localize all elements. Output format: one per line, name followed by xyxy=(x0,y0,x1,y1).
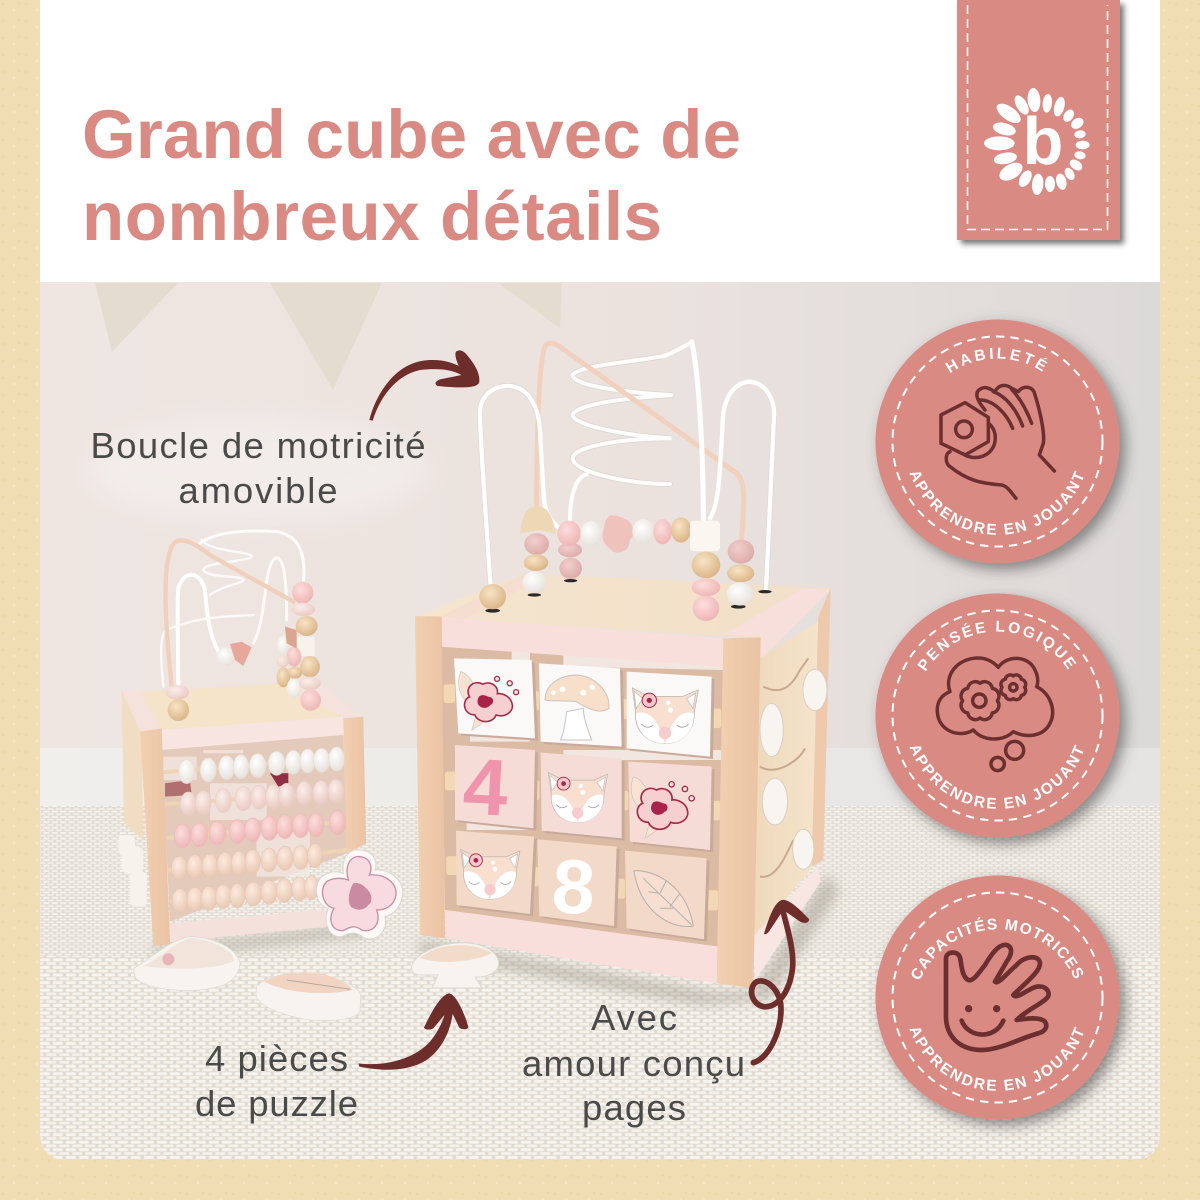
white header panel xyxy=(40,0,1160,283)
arrow to wire loop xyxy=(369,350,479,421)
puzzle piece: flower xyxy=(316,850,403,939)
soft glow behind top label xyxy=(116,436,404,504)
badge text bottom: APPRENDRE EN JOUANT xyxy=(910,744,1084,809)
small cube side knobs xyxy=(118,835,147,907)
tile art: flowers xyxy=(459,672,519,730)
side knobs xyxy=(760,669,827,869)
big cube body drawn in 3x coordinates xyxy=(415,573,831,988)
small cube rails xyxy=(122,690,162,731)
label: 4 pièces de puzzle: 4 pièces xyxy=(205,1038,348,1079)
side face xyxy=(753,622,818,937)
tile art: mushroom xyxy=(545,675,609,740)
rug xyxy=(40,806,1160,1160)
label: 4 pièces de puzzle xyxy=(195,1038,358,1124)
tile edge shadows xyxy=(457,661,715,942)
pink wire xyxy=(537,343,744,540)
spiral wire xyxy=(570,343,690,520)
brand tag with logo: b xyxy=(1023,105,1063,179)
icon: hand holding nut xyxy=(941,385,1054,498)
small cube left side xyxy=(122,690,146,840)
label: avec amour conçu pages: amour conçu xyxy=(522,1043,745,1084)
bunting pennants xyxy=(95,283,562,390)
tile art: leaf xyxy=(634,871,693,927)
big cube posts xyxy=(415,616,445,938)
label: avec amour conçu pages xyxy=(522,997,745,1128)
puzzle piece: leaf xyxy=(256,973,361,1021)
puzzle piece: fox xyxy=(134,937,240,991)
badge: capacités motrices xyxy=(872,872,1136,1136)
label: boucle de motricité: amovible xyxy=(178,470,338,511)
puzzle piece: mushroom xyxy=(411,943,499,988)
baseboard xyxy=(40,748,1160,810)
small cube beads xyxy=(166,582,321,721)
white wires xyxy=(480,342,774,590)
tile art: number 4: 4 xyxy=(461,741,511,833)
small cube abacus rows xyxy=(163,747,347,913)
small cube posts xyxy=(140,728,170,947)
small cube top xyxy=(140,683,343,731)
badge text top: PENSÉE LOGIQUE xyxy=(917,620,1076,672)
icon: smiling hand xyxy=(946,945,1049,1050)
interior xyxy=(441,647,723,947)
badge text bottom: APPRENDRE EN JOUANT xyxy=(910,470,1084,535)
small cube interior xyxy=(162,735,347,922)
arrow to cube side xyxy=(752,900,809,1063)
back rails xyxy=(442,573,550,619)
label: avec amour conçu pages: pages xyxy=(582,1087,686,1128)
tile art: foxes xyxy=(632,688,698,743)
activity tiles xyxy=(454,658,712,939)
rod pegs xyxy=(443,684,722,911)
floor shadow of cubes xyxy=(150,875,840,1005)
big activity cube xyxy=(411,342,831,988)
tile art: number 8: 8 xyxy=(550,844,597,931)
beads xyxy=(479,506,754,621)
label: avec amour conçu pages: Avec xyxy=(591,997,677,1038)
right rail xyxy=(723,588,831,660)
label: 4 pièces de puzzle: de puzzle xyxy=(195,1083,358,1124)
big cube bottom rail xyxy=(445,910,718,983)
title: nombreux détails xyxy=(82,178,662,255)
brand tag with logo xyxy=(957,0,1120,240)
wire shadows xyxy=(480,357,774,590)
wall xyxy=(40,282,1160,752)
pins xyxy=(485,579,772,613)
title xyxy=(82,96,741,255)
small activity cube with abacus xyxy=(118,531,403,1021)
badge text bottom: APPRENDRE EN JOUANT xyxy=(910,1026,1084,1091)
small cube bottom rail xyxy=(170,909,330,942)
title: Grand cube avec de xyxy=(82,96,741,173)
icon: thought cloud with gears xyxy=(937,658,1053,771)
badge text top: CAPACITÉS MOTRICES xyxy=(912,917,1084,979)
badge: pensée logique xyxy=(872,590,1136,854)
label: boucle de motricité xyxy=(90,425,426,511)
top face xyxy=(415,573,831,638)
product photo scene xyxy=(40,282,1160,1160)
big cube top front rail xyxy=(442,618,723,656)
label: boucle de motricité: Boucle de motricité xyxy=(90,425,426,466)
badge text top: HABILETÉ xyxy=(945,348,1048,373)
big cube wires and beads, drawn in 3x coordinates xyxy=(479,342,774,621)
badge: habileté xyxy=(872,316,1136,580)
arrow to puzzle pieces xyxy=(358,993,468,1070)
small cube wires xyxy=(161,531,304,687)
